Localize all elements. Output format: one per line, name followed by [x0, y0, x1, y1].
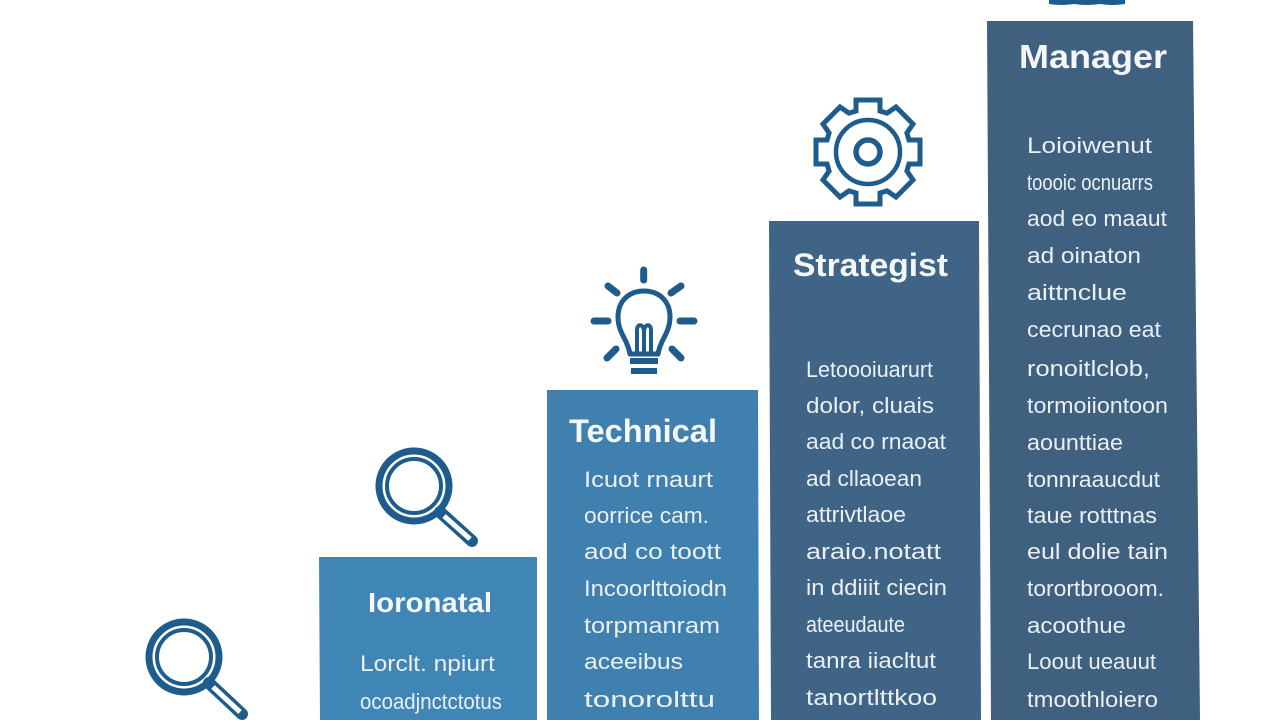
text block: step 4	[1027, 133, 1168, 712]
text block: step 3: attrivtlaoe	[806, 502, 906, 527]
icon: magnifier step 0	[149, 622, 242, 714]
text block: step 4: aod eo maaut	[1027, 206, 1167, 231]
text block: step 4: acoothue	[1027, 613, 1126, 638]
text block: step 4: ronoitlclob,	[1027, 356, 1150, 381]
heading: step 4: Manager	[1019, 38, 1167, 75]
text block: step 2: Incoorlttoiodn	[584, 576, 727, 601]
text block: step 3: araio.notatt	[806, 539, 941, 564]
icon: gear	[816, 100, 920, 204]
text block: step 4: toooic ocnuarrs	[1027, 170, 1153, 195]
text block: step 2: aceeibus	[584, 649, 683, 674]
text block: step 4: tmoothloiero	[1027, 687, 1158, 712]
text block: step 1: Lorclt. npiurt	[360, 651, 495, 676]
icon: lightbulb	[594, 270, 694, 371]
text block: step 2: aod co toott	[584, 539, 721, 564]
text block: step 3: in ddiiit ciecin	[806, 575, 947, 600]
text block: step 4: tormoiiontoon	[1027, 393, 1168, 418]
text block: step 2	[584, 467, 727, 712]
heading: step 3: Strategist	[793, 247, 948, 283]
panel: step 1	[319, 557, 537, 720]
text block: step 3: Letoooiuarurt	[806, 357, 933, 382]
text block: step 2: oorrice cam.	[584, 503, 709, 528]
heading: step 1: Ioronatal	[368, 587, 492, 618]
icon: magnifier step 1	[379, 451, 472, 541]
text block: step 2: torpmanram	[584, 613, 720, 638]
panel: step 2	[547, 390, 759, 720]
text block: step 4: eul dolie tain	[1027, 539, 1168, 564]
text block: step 4: Loout ueauut	[1027, 649, 1156, 674]
text block: step 3: ateeudaute	[806, 612, 905, 637]
panel: step 4	[987, 21, 1200, 720]
text block: step 3: aad co rnaoat	[806, 429, 946, 454]
text block: step 4: cecrunao eat	[1027, 317, 1161, 342]
text block: step 4: Loioiwenut	[1027, 133, 1152, 158]
text block: step 3: tanortlttkoo	[806, 685, 937, 710]
text block: step 2: Icuot rnaurt	[584, 467, 713, 492]
panel: step 3	[769, 221, 981, 720]
text block: step 3: ad cllaoean	[806, 466, 922, 491]
text block: step 4: aittnclue	[1027, 280, 1127, 305]
text block: step 4: torortbrooom.	[1027, 576, 1164, 601]
text block: step 3: tanra iiacltut	[806, 648, 936, 673]
text block: step 4: tonnraaucdut	[1027, 467, 1160, 492]
text block: step 2: tonorolttu	[584, 687, 715, 712]
text block: step 3: dolor, cluais	[806, 393, 934, 418]
text block: step 1	[360, 651, 502, 714]
text block: step 4: aounttiae	[1027, 430, 1123, 455]
icon: cropped top icon	[1049, 0, 1125, 5]
text block: step 3	[806, 357, 947, 710]
text block: step 4: ad oinaton	[1027, 243, 1141, 268]
text block: step 1: ocoadjnctctotus	[360, 689, 502, 714]
heading: step 2: Technical	[569, 413, 717, 449]
text block: step 4: taue rotttnas	[1027, 503, 1157, 528]
